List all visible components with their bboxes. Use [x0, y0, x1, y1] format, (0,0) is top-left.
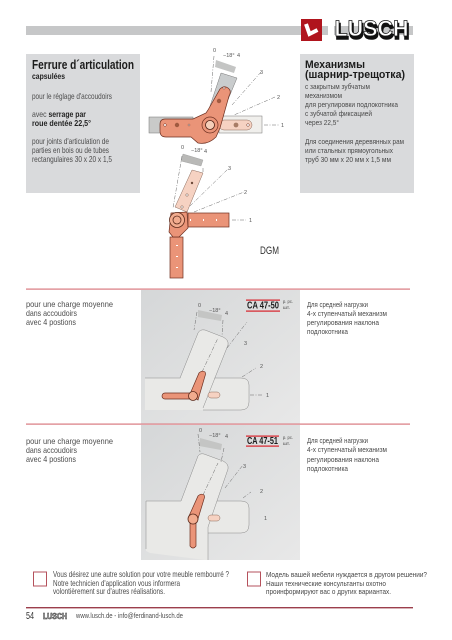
diagram: DGM hinge: 4: [204, 149, 207, 155]
callout text: [266, 570, 427, 596]
product code: CA 47-51: CA 47-51: [247, 435, 278, 447]
product code: CA 47-51: шт.: [283, 442, 290, 447]
diagram: top hinge: 2: [277, 95, 280, 101]
label: DGM: DGM: [260, 245, 279, 257]
panel: CA 47-51 diagram: 3: [243, 464, 246, 470]
text block: CA 47-50 French: pour une charge moyenne: [26, 299, 113, 309]
text block: CA 47-50 French: [26, 299, 113, 327]
panel: CA 47-50 diagram: −18°: [209, 308, 221, 314]
text block: description: Для соединения деревянных рам: [305, 137, 404, 146]
text block: description: [32, 91, 112, 164]
callout text: volontièrement sur d'autres réalisations.: [53, 586, 165, 596]
panel: CA 47-50 diagram: 2: [260, 364, 263, 370]
text block: description: avec serrage par: [32, 109, 87, 119]
diagram: top hinge: [149, 48, 284, 143]
text block: description: для регулировки подлокотника: [305, 100, 399, 109]
text block: CA 47-51 French: dans accoudoirs: [26, 445, 77, 455]
text block: description: [305, 82, 404, 164]
text block: description: roue dentée 22,5°: [32, 118, 91, 128]
subheading: capsulées: [32, 71, 65, 81]
text block: CA 47-51 Russian: подлокотника: [307, 464, 349, 473]
panel: CA 47-50 diagram: 3: [244, 341, 247, 347]
footer contact: www.lusch.de - info@ferdinand-lusch.de: [75, 611, 183, 620]
product code: CA 47-50: p. pc.: [283, 300, 293, 305]
callout: Russian: [248, 570, 427, 596]
panel: CA 47-51 diagram: [141, 425, 300, 560]
footer rule: [26, 607, 413, 608]
text block: CA 47-51 Russian: 4-х ступенчатый механизм: [307, 445, 387, 454]
panel: CA 47-50 diagram: 0: [198, 303, 201, 309]
footer: [26, 611, 183, 622]
diagram: DGM hinge: 2: [244, 190, 247, 196]
callout text: Vous désirez une autre solution pour votre meuble rembourré ?: [53, 569, 229, 579]
panel: CA 47-50 diagram: [141, 290, 300, 424]
diagram: DGM hinge: 3: [228, 166, 231, 172]
callout text: Notre technicien d'application vous informera: [53, 578, 180, 588]
text block: CA 47-50 Russian: Для средней нагрузки: [307, 300, 368, 309]
text block: description: через 22,5°: [305, 118, 339, 127]
logo: Lusch: LUSCH: [336, 19, 410, 44]
text block: description: parties en bois ou de tubes: [32, 145, 109, 155]
text block: description: или стальных прямоугольных: [305, 146, 393, 155]
text block: description: труб 30 мм х 20 мм х 1,5 мм: [305, 155, 391, 164]
callout text: проинформируют вас о других вариантах.: [266, 587, 391, 596]
diagram: top hinge: −18°: [223, 53, 235, 59]
text block: CA 47-51 French: pour une charge moyenne: [26, 436, 113, 446]
callout: French: [34, 569, 229, 596]
heading: Ferrure d'articulation: Ferrure d´articulation: [32, 57, 134, 72]
diagram: top hinge: 0: [213, 48, 216, 54]
panel: Russian description: [300, 54, 414, 193]
text block: CA 47-51 French: avec 4 postions: [26, 454, 76, 464]
diagram: DGM hinge: 0: [181, 145, 184, 151]
text block: description: rectangulaires 30 x 20 x 1,5: [32, 154, 112, 164]
heading: Механизмы: [305, 59, 405, 81]
diagram: top hinge: 4: [237, 53, 240, 59]
text block: CA 47-51 Russian: [307, 436, 387, 473]
text block: description: pour joints d'articulation de: [32, 136, 109, 146]
panel: CA 47-51 diagram: 1: [264, 516, 267, 522]
text block: CA 47-50 French: dans accoudoirs: [26, 308, 77, 318]
panel: CA 47-51 diagram: −18°: [209, 433, 221, 439]
header band: [26, 26, 413, 35]
text block: CA 47-50 Russian: [307, 300, 387, 336]
diagram: top hinge: 1: [281, 123, 284, 129]
section rules: [26, 288, 410, 425]
icon: red checkbox: [34, 572, 46, 586]
panel: CA 47-51 diagram: 2: [260, 489, 263, 495]
product code: CA 47-50: CA 47-50: [247, 300, 279, 312]
panel: French description: [26, 54, 140, 193]
callout text: Модель вашей мебели нуждается в другом решении?: [266, 570, 427, 579]
icon: red checkbox: [248, 572, 260, 586]
text block: description: механизмом: [305, 91, 342, 100]
diagram: DGM hinge: 1: [249, 218, 252, 224]
logo: Lusch: LUSCH: [334, 16, 408, 41]
text block: CA 47-50 French: avec 4 postions: [26, 317, 76, 327]
page number: 54: [26, 611, 34, 622]
text block: description: с зубчатой фиксацией: [305, 109, 372, 118]
text block: CA 47-51 French: [26, 436, 113, 464]
heading: Механизмы: (шарнир-трещотка): [305, 69, 405, 81]
diagram: DGM hinge: [169, 145, 252, 278]
product code: CA 47-51: p. pc.: [283, 436, 293, 441]
text block: CA 47-51 Russian: Для средней нагрузки: [307, 436, 368, 445]
diagram: DGM hinge: −18°: [191, 148, 203, 154]
text block: CA 47-50 Russian: подлокотника: [307, 327, 349, 336]
text block: CA 47-50 Russian: регулирования наклона: [307, 318, 380, 327]
text block: CA 47-50 Russian: 4-х ступенчатый механизм: [307, 309, 387, 318]
callout text: Наши технические консультанты охотно: [266, 579, 386, 588]
footer logo: LUSCH: [43, 612, 67, 621]
product code: CA 47-50: шт.: [283, 306, 290, 311]
panel: CA 47-50 diagram: 1: [266, 393, 269, 399]
heading: Механизмы: Механизмы: [305, 59, 365, 71]
text block: description: с закрытым зубчатым: [305, 82, 370, 91]
text block: CA 47-51 Russian: регулирования наклона: [307, 455, 380, 464]
logo: Lusch: [301, 16, 410, 44]
text block: description: pour le réglage d'accoudoirs: [32, 91, 112, 101]
diagram: top hinge: 3: [260, 70, 263, 76]
callout text: [53, 569, 229, 596]
panel: CA 47-50 diagram: 4: [225, 311, 228, 317]
panel: CA 47-51 diagram: 0: [199, 428, 202, 434]
panel: CA 47-51 diagram: 4: [225, 434, 228, 440]
